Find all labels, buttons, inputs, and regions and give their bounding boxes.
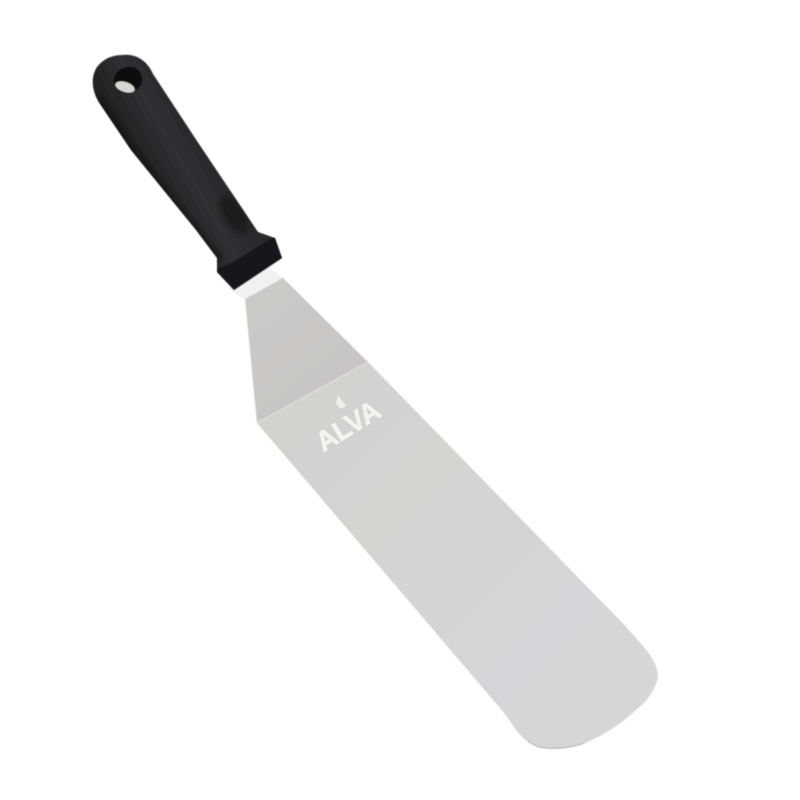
blade upper taper <box>245 278 368 423</box>
brand logo <box>310 394 386 458</box>
handle grip <box>93 55 282 290</box>
handle shading and recess <box>98 98 254 260</box>
blade bottom edge <box>528 741 585 748</box>
lower edge shadow <box>98 98 218 260</box>
blade bend highlight <box>257 362 368 423</box>
grip thumb recess <box>220 194 250 235</box>
handle collar <box>217 238 282 290</box>
hole light <box>114 80 136 94</box>
blade <box>228 267 658 749</box>
logo text: ALVA <box>310 394 386 458</box>
logo flame <box>336 395 346 409</box>
blade lower section <box>257 362 658 749</box>
hole interior <box>114 66 142 94</box>
hanging hole <box>114 66 142 94</box>
blade neck <box>228 267 285 300</box>
product photo: spatula <box>92 54 658 750</box>
handle <box>93 55 282 290</box>
